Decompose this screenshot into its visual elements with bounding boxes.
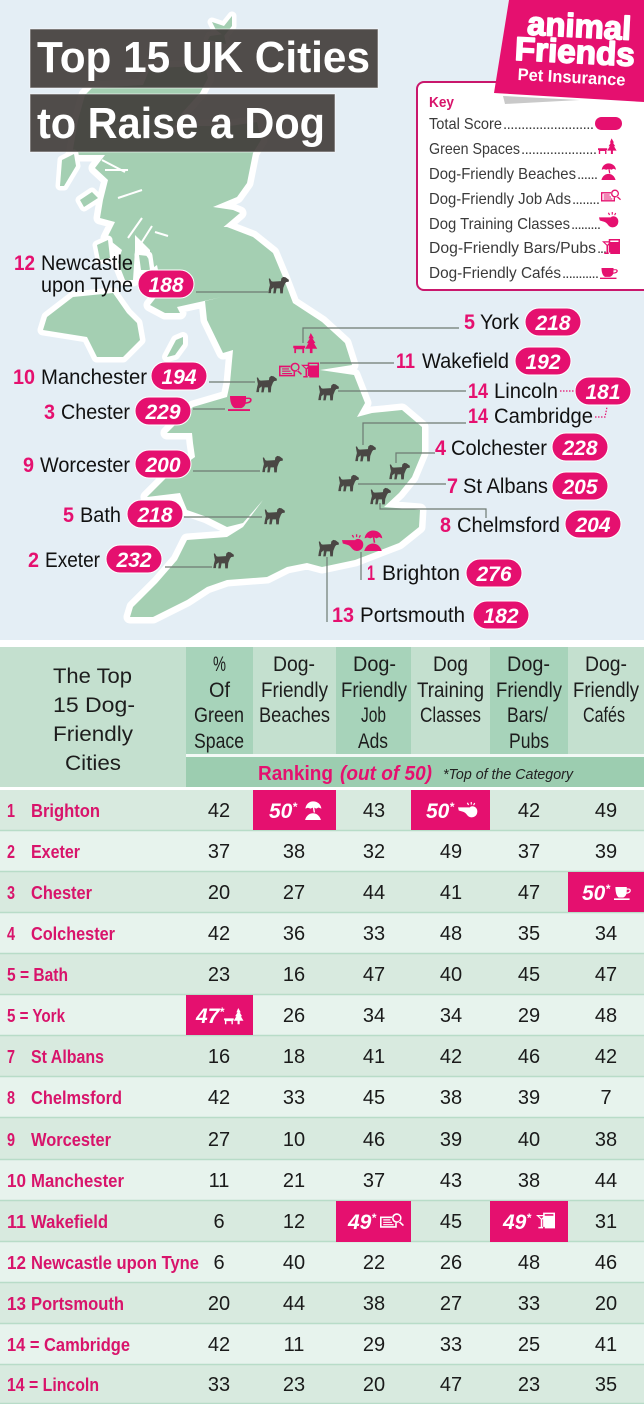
- city label: Chester: 229: [144, 401, 181, 424]
- city label: York: 5: [464, 311, 475, 334]
- row: Chester: 27: [283, 882, 305, 904]
- header: table title: Cities: [65, 752, 121, 775]
- city label: Exeter: Exeter: [45, 549, 100, 572]
- row: Exeter: 2: [7, 842, 15, 862]
- row: Chester: 3: [7, 883, 15, 903]
- row: Lincoln: 33: [208, 1374, 230, 1396]
- row: York: 34: [440, 1005, 462, 1027]
- row: Worcester: Worcester: [31, 1130, 111, 1150]
- row: Manchester: 44: [595, 1170, 617, 1192]
- city label: Chester: 3: [44, 401, 55, 424]
- dog: Lincoln: [318, 384, 339, 400]
- city label: Lincoln: Lincoln: [494, 380, 558, 403]
- icon: Wakefield job ad: [279, 363, 302, 376]
- city label: Portsmouth: 182: [483, 605, 519, 628]
- header: job ads: Friendly: [341, 679, 407, 702]
- row: Newcastle upon Tyne: Newcastle upon Tyne: [31, 1253, 199, 1273]
- header: job ads: [341, 653, 407, 753]
- city label: Chelmsford: Chelmsford: [457, 514, 560, 537]
- city label: Cambridge: Cambridge: [494, 405, 593, 428]
- row: Bath: 16: [283, 964, 305, 986]
- city label: Manchester: [13, 362, 207, 390]
- header: cafes: Cafés: [583, 704, 625, 727]
- row: Cambridge: 41: [595, 1334, 617, 1356]
- icon: Chester cup: [228, 396, 252, 411]
- city label: York: [464, 308, 581, 336]
- icon: Wakefield pint: [301, 362, 319, 378]
- header: training classes: [417, 653, 484, 727]
- table row backgrounds: [0, 790, 644, 1404]
- row: Exeter: Exeter: [31, 842, 80, 862]
- city label: Brighton: 276: [475, 563, 512, 586]
- dog: Bath: [264, 508, 285, 524]
- row: Chester: 44: [363, 882, 385, 904]
- city label: Lincoln: 14: [468, 380, 488, 403]
- logo: animal friends pet insurance: [494, 0, 644, 104]
- header: table title: The Top: [53, 665, 132, 688]
- city label: St Albans: 205: [561, 476, 598, 499]
- city label: Manchester: 194: [161, 366, 197, 389]
- row: York: 48: [595, 1005, 617, 1027]
- row: York: 5 = York: [7, 1006, 66, 1026]
- row: Portsmouth: 38: [363, 1293, 385, 1315]
- city label: Exeter: 2: [28, 549, 39, 572]
- map icons: [228, 333, 382, 551]
- key row: training classes: .........: [571, 216, 601, 233]
- city label: York: York: [480, 311, 519, 334]
- row: Chelmsford: 45: [363, 1087, 385, 1109]
- city label: St Albans: 7: [447, 475, 458, 498]
- row: Colchester: 36: [283, 923, 305, 945]
- row: Brighton: 42: [518, 800, 540, 822]
- city label: Wakefield: Wakefield: [422, 350, 509, 373]
- row: Brighton: Brighton: [31, 801, 100, 821]
- row: Chelmsford: 42: [208, 1087, 230, 1109]
- row: Worcester: 39: [440, 1129, 462, 1151]
- city label: Chelmsford: 8: [440, 514, 451, 537]
- key row: total score: Total Score: [429, 116, 502, 133]
- city label: Chelmsford: [440, 510, 621, 538]
- row: Portsmouth: 44: [283, 1293, 305, 1315]
- row: Brighton: 50: [269, 800, 292, 823]
- row: Wakefield: *: [526, 1211, 532, 1225]
- sea lochs: [102, 160, 168, 262]
- city label: Portsmouth: 13: [332, 604, 354, 627]
- row: Worcester: [7, 1129, 617, 1151]
- row: York: 47: [196, 1005, 219, 1028]
- city label: Lincoln: 181: [585, 381, 621, 404]
- title: [30, 29, 378, 152]
- row: Wakefield: 45: [440, 1211, 462, 1233]
- header: beaches: Friendly: [261, 679, 328, 702]
- header: job ads: Ads: [358, 730, 388, 753]
- city label: Cambridge: 14: [468, 405, 488, 428]
- row: Newcastle upon Tyne: 48: [518, 1252, 540, 1274]
- city label: Newcastle upon Tyne: upon Tyne: [41, 274, 133, 297]
- row: Worcester: 40: [518, 1129, 540, 1151]
- header: table title: 15 Dog-: [53, 694, 135, 717]
- row: Newcastle upon Tyne: 6: [213, 1252, 225, 1274]
- row: Chester: 47: [518, 882, 540, 904]
- landmass: Great Britain: [72, 66, 422, 617]
- row: Brighton: [7, 790, 617, 830]
- city label: Newcastle upon Tyne: 188: [148, 274, 184, 297]
- city label: Worcester: Worcester: [40, 454, 130, 477]
- row: Wakefield: 11: [7, 1212, 26, 1232]
- row: Colchester: 34: [595, 923, 617, 945]
- header: beaches: Dog-: [273, 653, 315, 676]
- row: St Albans: 42: [595, 1046, 617, 1068]
- dog: Portsmouth: [318, 540, 339, 556]
- city label: Wakefield: 11: [396, 350, 415, 373]
- row: Worcester: 27: [208, 1129, 230, 1151]
- city label: Bath: 218: [136, 504, 173, 527]
- row: Manchester: [7, 1170, 617, 1192]
- header: green space: Space: [194, 730, 244, 753]
- header: bars and pubs: [496, 653, 562, 753]
- row: Cambridge: [7, 1334, 617, 1356]
- row: Colchester: 48: [440, 923, 462, 945]
- row: Portsmouth: Portsmouth: [31, 1294, 124, 1314]
- city label: Chester: Chester: [61, 401, 130, 424]
- row: Colchester: 33: [363, 923, 385, 945]
- header: cafes: [573, 653, 639, 727]
- key heading: Key: [429, 94, 455, 111]
- row: Brighton: 49: [595, 800, 617, 822]
- dog: Colchester: [389, 463, 410, 479]
- table header: [0, 647, 644, 787]
- city label: Colchester: [435, 433, 608, 461]
- row: Cambridge: 42: [208, 1334, 230, 1356]
- key row: cafes: ...........: [562, 265, 599, 282]
- city label: Bath: Bath: [80, 504, 121, 527]
- city label: Worcester: [23, 450, 191, 478]
- row: Bath: 5 = Bath: [7, 965, 68, 985]
- header: job ads: Job: [361, 704, 386, 727]
- key row: bars and pubs: ...: [597, 240, 607, 257]
- row: St Albans: St Albans: [31, 1047, 104, 1067]
- row: Lincoln: 47: [440, 1374, 462, 1396]
- header: ranking band: *Top of the Category: [443, 766, 574, 783]
- landmass: Northern Ireland: [43, 293, 140, 357]
- title line 1: Top 15 UK Cities: [37, 33, 370, 82]
- row: Worcester: 9: [7, 1130, 15, 1150]
- header: table title: [53, 665, 135, 775]
- icon: Brighton beach: [364, 530, 382, 551]
- row: Lincoln: 20: [363, 1374, 385, 1396]
- row: Manchester: 10: [7, 1171, 26, 1191]
- row: St Albans: [7, 1046, 617, 1068]
- title line 2: to Raise a Dog: [37, 99, 325, 148]
- city label: Bath: [63, 500, 183, 528]
- header: bars and pubs: Pubs: [509, 730, 549, 753]
- row: Lincoln: 23: [518, 1374, 540, 1396]
- row: Lincoln: [7, 1374, 617, 1396]
- row: Exeter: 38: [283, 841, 305, 863]
- row: Wakefield: [7, 1201, 617, 1242]
- dog: Newcastle: [268, 277, 289, 293]
- header: green space: Of: [209, 679, 230, 702]
- key row: training classes: Dog Training Classes: [429, 216, 570, 233]
- row: Brighton: 1: [7, 801, 15, 821]
- key row: beaches: ......: [577, 166, 598, 183]
- icon: York bench and tree: [293, 333, 317, 353]
- row: Chelmsford: 39: [518, 1087, 540, 1109]
- row: Wakefield: 49: [503, 1211, 526, 1234]
- dog: Exeter: [213, 552, 234, 568]
- header: cafes: Dog-: [585, 653, 627, 676]
- map background panel: [0, 0, 644, 640]
- city label: Exeter: [28, 545, 162, 573]
- row: Portsmouth: 20: [595, 1293, 617, 1315]
- row: Bath: 45: [518, 964, 540, 986]
- row: Lincoln: 14 = Lincoln: [7, 1375, 99, 1395]
- row: Newcastle upon Tyne: 40: [283, 1252, 305, 1274]
- city label: Portsmouth: Portsmouth: [360, 604, 465, 627]
- row: Bath: 47: [595, 964, 617, 986]
- row: Portsmouth: 13: [7, 1294, 26, 1314]
- city label: St Albans: [447, 472, 608, 500]
- row: Colchester: 42: [208, 923, 230, 945]
- row: Exeter: 39: [595, 841, 617, 863]
- row: Brighton: *: [449, 800, 455, 814]
- dog: St Albans: [338, 475, 359, 491]
- row: Chelmsford: Chelmsford: [31, 1088, 122, 1108]
- header: bars and pubs: Bars/: [507, 704, 548, 727]
- dog: Chelmsford: [370, 488, 391, 504]
- row: Cambridge: 25: [518, 1334, 540, 1356]
- row: Wakefield: 12: [283, 1211, 305, 1233]
- row: Newcastle upon Tyne: 46: [595, 1252, 617, 1274]
- row: Manchester: 43: [440, 1170, 462, 1192]
- dog markers: [213, 277, 410, 568]
- city label: Wakefield: [396, 347, 571, 375]
- header: beaches: [259, 653, 330, 727]
- row: St Albans: 18: [283, 1046, 305, 1068]
- city label: York: 218: [534, 312, 571, 335]
- city label: Newcastle upon Tyne: 12: [14, 252, 35, 275]
- header: bars and pubs: Friendly: [496, 679, 562, 702]
- row: Worcester: 46: [363, 1129, 385, 1151]
- row: Brighton: 42: [208, 800, 230, 822]
- key row: job ads: Dog-Friendly Job Ads: [429, 191, 571, 208]
- row: Chester: 20: [208, 882, 230, 904]
- row: Chester: *: [605, 882, 611, 896]
- row: Colchester: 35: [518, 923, 540, 945]
- row: Wakefield: Wakefield: [31, 1212, 108, 1232]
- city label: Exeter: 232: [115, 549, 152, 572]
- key row: training classes: [429, 212, 618, 233]
- row: Chester: 41: [440, 882, 462, 904]
- row: Newcastle upon Tyne: [7, 1252, 617, 1274]
- row: Bath: 40: [440, 964, 462, 986]
- row: Cambridge: 33: [440, 1334, 462, 1356]
- dog: Worcester: [262, 456, 283, 472]
- city label: Portsmouth: [332, 601, 529, 629]
- row: St Albans: 7: [7, 1047, 15, 1067]
- row: Chelmsford: 33: [283, 1087, 305, 1109]
- row: Portsmouth: [7, 1293, 617, 1315]
- key row: beaches: Dog-Friendly Beaches: [429, 166, 576, 183]
- row: Exeter: 37: [518, 841, 540, 863]
- row: York: *: [219, 1005, 225, 1019]
- row: Manchester: 11: [209, 1170, 229, 1192]
- city label: Newcastle upon Tyne: Newcastle: [41, 252, 133, 275]
- header: table title: Friendly: [53, 723, 134, 746]
- row: York: [7, 995, 617, 1035]
- key row: total score: [429, 116, 622, 133]
- row: Chelmsford: 38: [440, 1087, 462, 1109]
- row: Manchester: 37: [363, 1170, 385, 1192]
- city label: Chester: [44, 397, 191, 425]
- row: Wakefield: 31: [595, 1211, 617, 1233]
- row: Exeter: 32: [363, 841, 385, 863]
- row: York: 29: [518, 1005, 540, 1027]
- city label: Brighton: Brighton: [382, 562, 460, 585]
- city label: Bath: 5: [63, 504, 74, 527]
- row: Worcester: 38: [595, 1129, 617, 1151]
- city label: Lincoln: [468, 377, 631, 405]
- header: green space: Green: [194, 704, 244, 727]
- header: training classes: Training: [417, 679, 484, 702]
- row: Cambridge: 29: [363, 1334, 385, 1356]
- city label: Colchester: Colchester: [451, 437, 547, 460]
- row: St Albans: 46: [518, 1046, 540, 1068]
- row: St Albans: 41: [363, 1046, 385, 1068]
- row: Chelmsford: 8: [7, 1088, 15, 1108]
- row: Lincoln: 23: [283, 1374, 305, 1396]
- row: Lincoln: 35: [595, 1374, 617, 1396]
- row: Portsmouth: 20: [208, 1293, 230, 1315]
- row: Bath: 47: [363, 964, 385, 986]
- city label: Wakefield: 192: [525, 351, 561, 374]
- row: Wakefield: 49: [348, 1211, 371, 1234]
- key row: cafes: Dog-Friendly Cafés: [429, 265, 561, 282]
- icon: Brighton whistle: [342, 534, 363, 551]
- city label: Brighton: 1: [367, 562, 375, 585]
- row: Chester: 50: [582, 882, 605, 905]
- header: green space: [194, 653, 244, 753]
- dog: Cambridge: [355, 445, 376, 461]
- row: Colchester: Colchester: [31, 924, 115, 944]
- key row: green spaces: Green Spaces: [429, 141, 520, 158]
- row: Chelmsford: 7: [600, 1087, 612, 1109]
- key row: total score: .........................: [503, 116, 594, 133]
- row: Colchester: [7, 923, 617, 945]
- landmass: Hebrides and islands: [60, 16, 232, 270]
- header: ranking band: [258, 763, 574, 785]
- row: Chelmsford: [7, 1087, 612, 1109]
- row: Newcastle upon Tyne: 12: [7, 1253, 26, 1273]
- key row: green spaces: .....................: [521, 141, 597, 158]
- row: Worcester: 10: [283, 1129, 305, 1151]
- row: Bath: [7, 964, 617, 986]
- row: Bath: 23: [208, 964, 230, 986]
- header: beaches: Beaches: [259, 704, 330, 727]
- row: Brighton: 43: [363, 800, 385, 822]
- logo: animal friends pet insurance: animal: [526, 4, 632, 47]
- city label: Worcester: 9: [23, 454, 34, 477]
- row: Chester: Chester: [31, 883, 92, 903]
- row: St Albans: 42: [440, 1046, 462, 1068]
- city label: Colchester: 228: [561, 437, 598, 460]
- city label: Chelmsford: 204: [574, 514, 611, 537]
- row: Manchester: 38: [518, 1170, 540, 1192]
- logo: animal friends pet insurance: Pet Insurance: [517, 65, 626, 90]
- row: Portsmouth: 27: [440, 1293, 462, 1315]
- header: training classes: Classes: [420, 704, 481, 727]
- key row: job ads: ........: [572, 191, 600, 208]
- landmass: Isle of Man: [167, 337, 183, 357]
- row: Wakefield: *: [371, 1211, 377, 1225]
- header: ranking band: (out of 50): [340, 763, 432, 785]
- city label: Colchester: 4: [435, 437, 446, 460]
- header: green space: %: [213, 653, 226, 676]
- row: York: 34: [363, 1005, 385, 1027]
- logo: animal friends pet insurance: Friends: [514, 30, 636, 73]
- city label: Manchester: Manchester: [41, 366, 147, 389]
- row: Colchester: 4: [7, 924, 15, 944]
- city label: Brighton: [367, 559, 522, 587]
- row: Cambridge: 11: [284, 1334, 304, 1356]
- city label: Newcastle upon Tyne: [14, 252, 194, 298]
- header: job ads: Dog-: [353, 653, 396, 676]
- leader lines: [165, 292, 607, 622]
- row: Wakefield: 6: [213, 1211, 225, 1233]
- header: ranking band: Ranking: [258, 763, 333, 785]
- row: Exeter: [7, 841, 617, 863]
- row: Brighton: 50: [426, 800, 449, 823]
- key row: bars and pubs: Dog-Friendly Bars/Pubs: [429, 240, 596, 257]
- row: Manchester: 21: [283, 1170, 305, 1192]
- map of the UK: [43, 16, 422, 617]
- city label: Manchester: 10: [13, 366, 35, 389]
- row: Brighton: *: [292, 800, 298, 814]
- row: Portsmouth: 33: [518, 1293, 540, 1315]
- row: St Albans: 16: [208, 1046, 230, 1068]
- row: York: 26: [283, 1005, 305, 1027]
- row: Exeter: 37: [208, 841, 230, 863]
- key panel: [417, 82, 644, 290]
- dog: Manchester: [256, 376, 277, 392]
- row: Newcastle upon Tyne: 26: [440, 1252, 462, 1274]
- key row: green spaces: [429, 138, 617, 158]
- header: bars and pubs: Dog-: [507, 653, 550, 676]
- city label: Worcester: 200: [144, 454, 181, 477]
- row: Exeter: 49: [440, 841, 462, 863]
- row: Manchester: Manchester: [31, 1171, 124, 1191]
- header: training classes: Dog: [433, 653, 468, 676]
- row: Cambridge: 14 = Cambridge: [7, 1335, 130, 1355]
- city label: St Albans: St Albans: [463, 475, 548, 498]
- row: Newcastle upon Tyne: 22: [363, 1252, 385, 1274]
- row: Chester: [7, 872, 644, 912]
